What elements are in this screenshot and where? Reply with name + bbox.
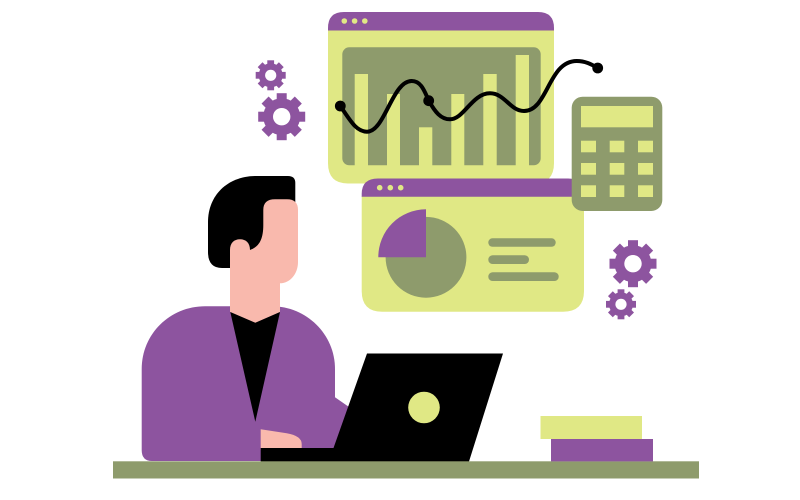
icon: large gear top left [258, 93, 305, 140]
bar chart [355, 55, 529, 166]
neck and ear [230, 199, 298, 323]
window header [328, 12, 554, 30]
shirt [230, 312, 280, 422]
arm behind laptop [330, 397, 349, 450]
calculator screen and keys [581, 106, 653, 197]
chart background [342, 47, 541, 165]
stacked books [540, 416, 653, 461]
laptop [261, 354, 503, 462]
window header [362, 178, 584, 197]
icon: large gear right [610, 240, 656, 287]
window dots [342, 18, 368, 24]
hand [261, 429, 302, 450]
hair [208, 176, 295, 268]
icon: small gear top left [256, 60, 286, 90]
person [142, 176, 349, 461]
pie slice [378, 209, 426, 257]
window dots [377, 185, 404, 190]
laptop logo [408, 392, 440, 423]
line graph [335, 61, 603, 132]
text lines [488, 238, 559, 281]
jacket [142, 306, 335, 461]
window body [362, 196, 584, 312]
pie chart [386, 217, 466, 298]
icon: calculator [572, 97, 662, 211]
icon: small gear right [606, 289, 636, 319]
panel: pie chart window [362, 178, 584, 312]
window body [328, 30, 554, 184]
desk [113, 461, 699, 478]
panel: bar chart window [328, 12, 554, 184]
